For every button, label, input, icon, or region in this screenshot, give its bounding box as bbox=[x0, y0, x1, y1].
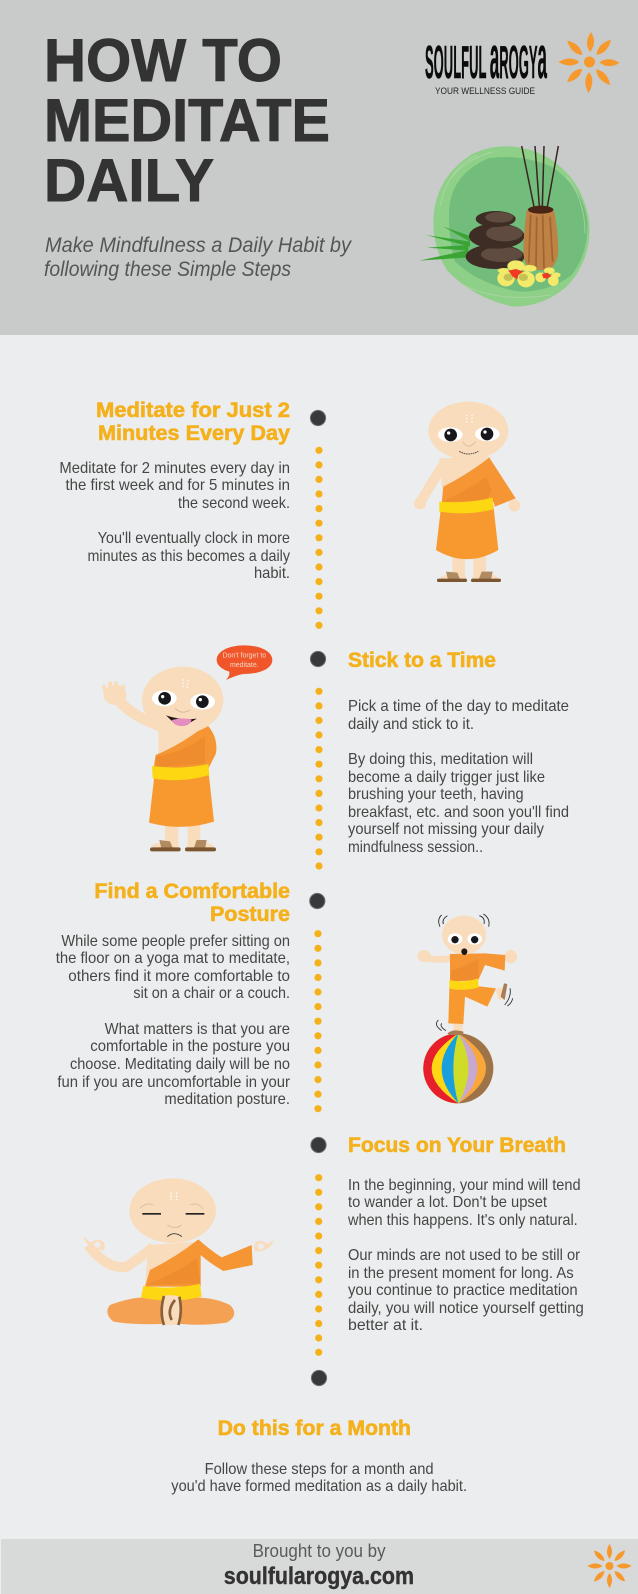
step 1 text: You'll eventually clock in more bbox=[98, 530, 290, 547]
ball bbox=[423, 1033, 493, 1103]
icon: orange sun logo bbox=[558, 32, 620, 93]
step 3 text: What matters is that you are bbox=[105, 1021, 290, 1038]
logo text: SOULFUL aROGYa bbox=[425, 24, 547, 91]
step 1 text: minutes as this becomes a daily bbox=[88, 548, 290, 565]
subtitle: Make Mindfulness a Daily Habit by bbox=[45, 234, 352, 257]
title: MEDITATE bbox=[44, 87, 330, 154]
footer credit: Brought to you by bbox=[253, 1541, 386, 1561]
step 3 heading bbox=[94, 880, 290, 926]
closing text bbox=[171, 1461, 467, 1495]
step 2 text bbox=[348, 698, 569, 856]
step 2 text: become a daily trigger just like bbox=[348, 769, 545, 786]
step 1 text: Meditate for 2 minutes every day in bbox=[59, 460, 290, 477]
step 4 text: when this happens. It's only natural. bbox=[347, 1212, 578, 1229]
title: DAILY bbox=[44, 147, 214, 214]
step 4 text: better at it. bbox=[348, 1317, 423, 1334]
logo text: YOUR WELLNESS GUIDE bbox=[435, 86, 535, 97]
step 1 heading bbox=[96, 399, 290, 445]
subtitle: following these Simple Steps bbox=[44, 258, 291, 281]
title: HOW TO bbox=[44, 27, 282, 94]
step 2 text: breakfast, etc. and soon you'll find bbox=[348, 804, 569, 821]
illustration: monk balancing on ball bbox=[417, 914, 517, 1103]
step 3 text: fun if you are uncomfortable in your bbox=[57, 1074, 291, 1091]
step 4 text: you continue to practice meditation bbox=[348, 1282, 578, 1299]
step 2 text: mindfulness session.. bbox=[348, 839, 483, 856]
illustration: meditating monk bbox=[83, 1178, 274, 1325]
step 1 text: the second week. bbox=[178, 495, 290, 512]
speech bubble bbox=[217, 645, 272, 680]
step 4 text: In the beginning, your mind will tend bbox=[348, 1177, 581, 1194]
speech bubble: Don't forget to bbox=[223, 653, 266, 660]
step 4 text: daily, you will notice yourself getting bbox=[348, 1300, 584, 1317]
illustration: standing monk bbox=[414, 402, 520, 582]
illustration: waving monk with speech bubble bbox=[104, 645, 272, 851]
icon: orange sun footer bbox=[588, 1544, 632, 1588]
step 2 text: daily and stick to it. bbox=[348, 716, 474, 733]
step 4 text: to wander a lot. Don't be upset bbox=[348, 1194, 548, 1211]
panel: footer bbox=[1, 1539, 638, 1594]
subtitle bbox=[44, 234, 352, 281]
step 2 text: yourself not missing your daily bbox=[348, 821, 544, 838]
step 2 text: Pick a time of the day to meditate bbox=[348, 698, 569, 715]
logo text bbox=[425, 24, 547, 97]
step 4 heading: Focus on Your Breath bbox=[348, 1134, 566, 1157]
closing text: you'd have formed meditation as a daily habit. bbox=[171, 1478, 467, 1495]
step 4 text: Our minds are not used to be still or bbox=[348, 1247, 581, 1264]
step 2 text: By doing this, meditation will bbox=[348, 751, 533, 768]
step 3 text: sit on a chair or a couch. bbox=[133, 985, 290, 1002]
illustration: incense and stones bbox=[419, 146, 590, 307]
title bbox=[44, 27, 330, 214]
step 1 text bbox=[59, 460, 290, 582]
step 1 heading: Minutes Every Day bbox=[98, 422, 290, 445]
speech bubble: meditate. bbox=[230, 662, 259, 669]
step 3 text: choose. Meditating daily will be no bbox=[70, 1056, 290, 1073]
step 3 heading: Find a Comfortable bbox=[94, 880, 290, 903]
step 2 text: brushing your teeth, having bbox=[348, 786, 524, 803]
step 1 text: the first week and for 5 minutes in bbox=[66, 477, 290, 494]
step 1 text: habit. bbox=[254, 565, 290, 582]
panel: header bbox=[0, 0, 638, 335]
footer website: soulfularogya.com bbox=[224, 1563, 414, 1590]
step 1 heading: Meditate for Just 2 bbox=[96, 399, 290, 422]
step 4 text: in the present moment for long. As bbox=[348, 1265, 574, 1282]
step 3 text bbox=[56, 933, 291, 1108]
closing heading: Do this for a Month bbox=[218, 1417, 411, 1440]
step 3 text: While some people prefer sitting on bbox=[61, 933, 290, 950]
timeline: dots and nodes bbox=[310, 410, 327, 1386]
step 3 text: meditation posture. bbox=[164, 1091, 290, 1108]
closing text: Follow these steps for a month and bbox=[205, 1461, 434, 1478]
step 3 heading: Posture bbox=[210, 903, 290, 926]
step 3 text: others find it more comfortable to bbox=[68, 968, 290, 985]
step 3 text: the floor on a yoga mat to meditate, bbox=[56, 950, 290, 967]
step 2 heading: Stick to a Time bbox=[348, 649, 496, 672]
step 4 text bbox=[347, 1177, 584, 1334]
step 3 text: comfortable in the posture you bbox=[90, 1038, 290, 1055]
